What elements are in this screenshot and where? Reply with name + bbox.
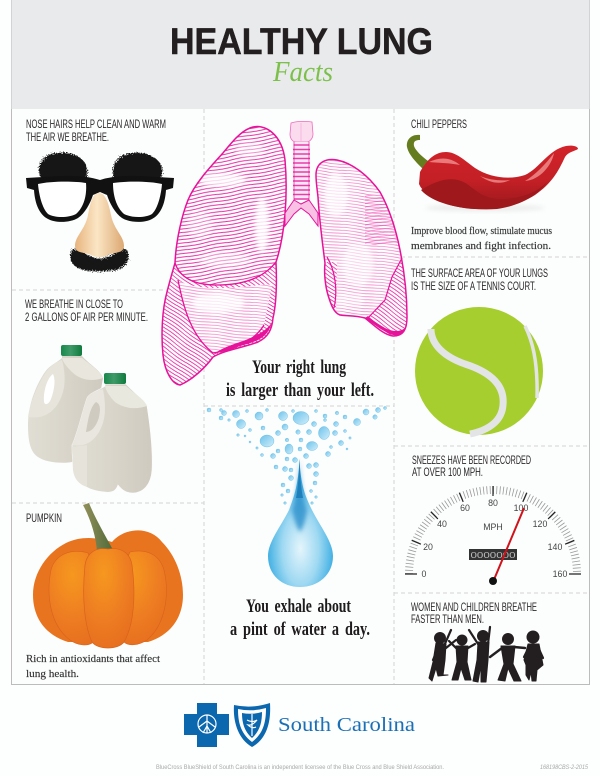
left lung [315, 155, 412, 345]
panel: gallons of air [25, 297, 152, 493]
heading: sneezes [412, 453, 531, 479]
footer disclaimer: BlueCross BlueShield of South Carolina is an independent licensee of the Blue Cross and Blue Shield Association. [156, 765, 444, 771]
heading: chili: CHILI PEPPERS [411, 117, 467, 131]
panel: nose hairs [26, 117, 174, 271]
icon: children silhouettes [429, 627, 543, 682]
chart: speedometer: 0000000 [470, 550, 516, 560]
panel: chili peppers [407, 117, 578, 252]
heading: children: FASTER THAN MEN. [411, 612, 484, 626]
text: water fact: You exhale about [246, 597, 352, 617]
heading: gallons: WE BREATHE IN CLOSE TO [25, 297, 123, 311]
text: chili: membranes and fight infection. [411, 241, 551, 252]
subtitle: Facts [272, 57, 333, 88]
chart: speedometer: 100 [514, 503, 528, 513]
text: water fact: a pint of water a day. [230, 620, 370, 640]
front jug [72, 373, 152, 493]
icon: milk jugs [28, 345, 152, 493]
heading: tennis: IS THE SIZE OF A TENNIS COURT. [411, 279, 536, 293]
brand name: South Carolina [278, 714, 415, 736]
heading: gallons [25, 297, 148, 324]
panel: tennis court [411, 266, 548, 435]
icon: blue cross [184, 703, 229, 747]
trachea [285, 121, 318, 226]
text: right lung fact [226, 358, 374, 401]
droplets spray [207, 406, 386, 504]
title: HEALTHY LUNG [170, 21, 433, 62]
icon: tennis ball [415, 307, 543, 435]
text: pumpkin: lung health. [26, 669, 79, 680]
chart: speedometer: 20 [423, 542, 433, 552]
right lung [160, 127, 290, 390]
chart: speedometer: 80 [488, 498, 498, 508]
text: right lung fact: is larger than your left. [226, 381, 374, 401]
heading: nose hairs: THE AIR WE BREATHE. [26, 130, 109, 144]
chart: speedometer: 40 [437, 519, 447, 529]
heading: tennis [411, 266, 548, 293]
water drop [268, 459, 333, 587]
header band [12, 0, 590, 109]
lungs illustration [160, 121, 412, 390]
panel: sneezes [405, 453, 581, 585]
text: chili [411, 226, 552, 252]
chart: speedometer: 0 [422, 569, 427, 579]
heading: pumpkin: PUMPKIN [26, 511, 62, 525]
chart: speedometer: 120 [533, 519, 547, 529]
icon: pumpkin [33, 503, 183, 648]
icon: groucho glasses [26, 153, 174, 271]
text: chili: Improve blood flow, stimulate mucus [411, 226, 552, 237]
heading: nose hairs [26, 117, 166, 144]
text: water fact [230, 597, 370, 640]
text: pumpkin [26, 654, 160, 680]
rear jug [28, 345, 103, 463]
chart: speedometer: 140 [548, 542, 562, 552]
icon: chili pepper [407, 135, 578, 212]
panel: pumpkin [26, 503, 183, 680]
heading: nose hairs: NOSE HAIRS HELP CLEAN AND WARM [26, 117, 166, 131]
heading: children [411, 600, 537, 626]
heading: sneezes: AT OVER 100 MPH. [412, 465, 483, 479]
text: pumpkin: Rich in antioxidants that affect [26, 654, 160, 665]
heading: gallons: 2 GALLONS OF AIR PER MINUTE. [25, 310, 148, 324]
chart: speedometer: MPH [483, 522, 503, 532]
chart: speedometer: 60 [460, 503, 470, 513]
illustration: water droplets and drop [207, 406, 386, 587]
chart: speedometer [405, 486, 581, 585]
icon: blue shield [234, 703, 270, 747]
footer code: 168198CBS-2-2015 [540, 765, 589, 771]
text: right lung fact: Your right lung [252, 358, 347, 378]
panel: women and children [411, 600, 543, 682]
grid dividers [12, 109, 589, 684]
chart: speedometer: 160 [553, 569, 567, 579]
logo: BlueCross BlueShield South Carolina [184, 703, 415, 747]
